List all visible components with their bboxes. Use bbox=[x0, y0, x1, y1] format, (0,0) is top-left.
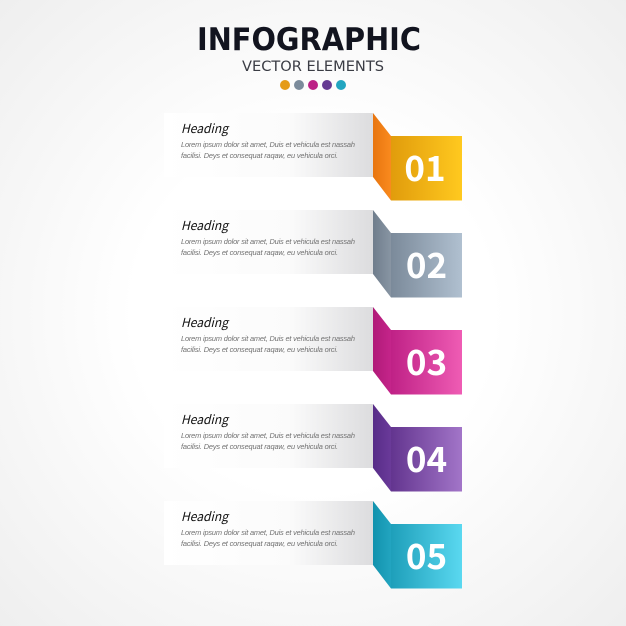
title: INFOGRAPHIC bbox=[197, 22, 421, 58]
number 01: 01 bbox=[404, 141, 446, 192]
body text 02: Lorem ipsum dolor sit amet, Duis et vehicula est nassah bbox=[181, 237, 355, 246]
body text 01: facilisi. Deys et consequat raqaw, eu vehicula orci. bbox=[181, 151, 338, 160]
fold 02 bbox=[373, 210, 391, 298]
panel 02 bbox=[164, 210, 373, 274]
heading 01: Heading bbox=[181, 118, 230, 137]
body text 03: Lorem ipsum dolor sit amet, Duis et vehicula est nassah bbox=[181, 334, 355, 343]
panel 01 bbox=[164, 113, 373, 177]
panel 04 bbox=[164, 404, 373, 468]
step 03 bbox=[164, 307, 462, 394]
body text 01 bbox=[181, 140, 355, 160]
step 01 bbox=[164, 113, 462, 200]
body text 04: Lorem ipsum dolor sit amet, Duis et vehicula est nassah bbox=[181, 431, 355, 440]
number 04: 04 bbox=[406, 432, 447, 483]
step 05 bbox=[164, 501, 462, 588]
body text 01: Lorem ipsum dolor sit amet, Duis et vehicula est nassah bbox=[181, 140, 355, 149]
fold 01 bbox=[373, 113, 391, 200]
heading 05: Heading bbox=[181, 506, 230, 525]
body text 03 bbox=[181, 334, 355, 354]
body text 03: facilisi. Deys et consequat raqaw, eu vehicula orci. bbox=[181, 345, 338, 354]
number block 03 bbox=[391, 330, 462, 394]
number block 01 bbox=[391, 136, 462, 200]
body text 04: facilisi. Deys et consequat raqaw, eu vehicula orci. bbox=[181, 442, 338, 451]
number block 04 bbox=[391, 427, 462, 492]
panel 03 bbox=[164, 307, 373, 371]
fold 04 bbox=[373, 404, 391, 492]
subtitle: VECTOR ELEMENTS bbox=[242, 59, 384, 75]
step 02 bbox=[164, 210, 462, 298]
body text 02: facilisi. Deys et consequat raqaw, eu vehicula orci. bbox=[181, 248, 338, 257]
number block 05 bbox=[391, 524, 462, 588]
step 04 bbox=[164, 404, 462, 492]
heading 04: Heading bbox=[181, 409, 230, 428]
panel 05 bbox=[164, 501, 373, 565]
fold 03 bbox=[373, 307, 391, 394]
body text 05: Lorem ipsum dolor sit amet, Duis et vehicula est nassah bbox=[181, 528, 355, 537]
body text 05: facilisi. Deys et consequat raqaw, eu vehicula orci. bbox=[181, 539, 338, 548]
body text 04 bbox=[181, 431, 355, 451]
body text 02 bbox=[181, 237, 355, 257]
number 02: 02 bbox=[406, 238, 447, 289]
number 05: 05 bbox=[406, 529, 447, 580]
number block 02 bbox=[391, 233, 462, 298]
fold 05 bbox=[373, 501, 391, 588]
body text 05 bbox=[181, 528, 355, 548]
number 03: 03 bbox=[406, 335, 447, 386]
colour dots bbox=[280, 80, 346, 90]
heading 03: Heading bbox=[181, 312, 230, 331]
heading 02: Heading bbox=[181, 215, 230, 234]
